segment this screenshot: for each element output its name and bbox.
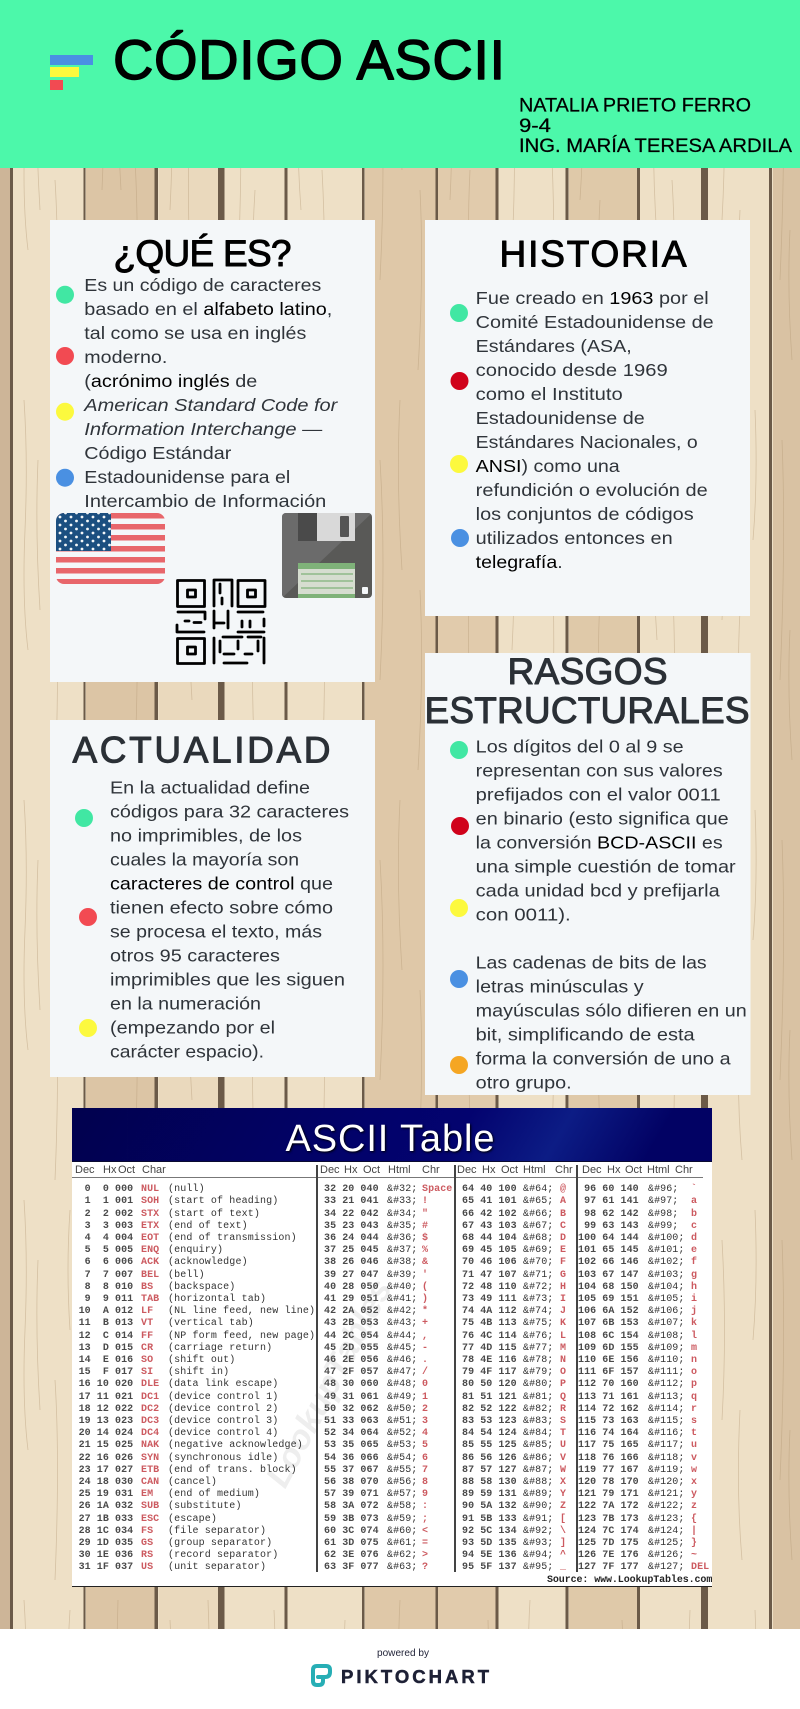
table column 1: NUL SOH STX ETX EOT ENQ ACK BEL BS TAB LF VT FF CR SO SI DLE DC1 DC2 DC3 DC4 NAK SYN ETB CAN EM SUB ESC FS GS RS US (141, 1184, 159, 1573)
author block: 9-4 (519, 116, 551, 137)
table column 3: &#64; &#65; &#66; &#67; &#68; &#69; &#70; &#71; &#72; &#73; &#74; &#75; &#76; &#77; &#78; &#79; &#80; &#81; &#82; &#83; &#84; &#85; &#86; &#87; &#88; &#89; &#90; &#91; &#92; &#93; &#94; &#95; (523, 1184, 553, 1573)
text block: rasgos: forma la conversión de uno a (476, 1048, 731, 1068)
text block: que es: American Standard Code for (83, 395, 339, 415)
column headers: Dec (457, 1164, 477, 1176)
source credit: Source: www.LookupTables.com (547, 1575, 712, 1586)
text block: historia: refundición o evolución de (476, 480, 708, 500)
text block: rasgos: letras minúsculas y (476, 976, 644, 996)
column headers: Char (142, 1164, 166, 1176)
panel: rasgos estructurales (424, 651, 750, 1095)
text block: rasgos: la conversión BCD-ASCII es (476, 832, 723, 852)
table column 4: ` a b c d e f g h i j k l m n o p q r s t u v w x y z { | } ~ DEL (691, 1184, 709, 1573)
panel: actualidad (50, 720, 375, 1077)
author block: ING. MARÍA TERESA ARDILA (519, 136, 792, 157)
bullets: rasgos (450, 741, 469, 1074)
heading: rasgos estructurales: RASGOS (508, 651, 668, 692)
text block: historia: utilizados entonces en (476, 528, 673, 548)
table banner: ASCII Table (286, 1118, 495, 1160)
text block: actualidad (110, 777, 349, 1061)
icon: floppy disk (282, 513, 372, 598)
text block: historia: Estándares (ASA, (476, 336, 632, 356)
text block: que es: Código Estándar (84, 443, 232, 463)
text block: rasgos: cada unidad bcd y prefijarla (476, 880, 720, 900)
text block: rasgos: otro grupo. (476, 1072, 572, 1092)
icon: qr code (177, 580, 265, 664)
table column 3: @ A B C D E F G H I J K L M N O P Q R S T U V W X Y Z [ \ ] ^ _ (560, 1184, 566, 1573)
table bottom rule (72, 1586, 712, 1587)
text block: historia: los conjuntos de códigos (476, 504, 694, 524)
text block: rasgos: Los dígitos del 0 al 9 se (476, 736, 684, 756)
text block: rasgos: una simple cuestión de tomar (476, 856, 736, 876)
text block: actualidad: tienen efecto sobre cómo (110, 897, 333, 917)
footer (0, 1629, 800, 1709)
column headers: Html (388, 1164, 411, 1176)
table column 2: &#32; &#33; &#34; &#35; &#36; &#37; &#38; &#39; &#40; &#41; &#42; &#43; &#44; &#45; &#46; &#47; &#48; &#49; &#50; &#51; &#52; &#53; &#54; &#55; &#56; &#57; &#58; &#59; &#60; &#61; &#62; &#63; (387, 1184, 417, 1573)
table column 2: Space ! " # $ % & ' ( ) * + , - . / 0 1 2 3 4 5 6 7 8 9 : ; < = > ? (422, 1184, 452, 1573)
table column 2 (324, 1184, 452, 1573)
table column 4 (578, 1184, 709, 1573)
column headers: Html (647, 1164, 670, 1176)
panel: que es (50, 220, 375, 682)
text block: rasgos: representan con sus valores (476, 760, 723, 780)
table column 3 (462, 1184, 566, 1573)
column headers: Chr (422, 1164, 440, 1176)
text block: historia: Fue creado en 1963 por el (476, 288, 709, 308)
text block: actualidad: otros 95 caracteres (110, 945, 280, 965)
table banner (72, 1108, 712, 1162)
text block: que es: (acrónimo inglés de (84, 371, 257, 391)
text block: actualidad: caracteres de control que (110, 873, 333, 893)
column headers: Oct (363, 1164, 380, 1176)
text block: que es: tal como se usa en inglés (84, 323, 306, 343)
table column 1: (null) (start of heading) (start of text) (end of text) (end of transmission) (enquiry) (acknowledge) (bell) (backspace) (horizontal tab) (NL line feed, new line) (vertical tab) (NP form feed, new page) (carriage return) (shift out) (shift in) (data link escape) (device control 1) (device control 2) (device control 3) (device control 4) (negative acknowledge) (synchronous idle) (end of trans. block) (cancel) (end of medium) (substitute) (escape) (file separator) (group separator) (record separator) (unit separator) (168, 1184, 315, 1573)
column headers: Hx (607, 1164, 620, 1176)
table column 1: 0 0 000 1 1 001 2 2 002 3 3 003 4 4 004 5 5 005 6 6 006 7 7 007 8 8 010 9 9 011 10 A 012 11 B 013 12 C 014 13 D 015 14 E 016 15 F 017 16 10 020 17 11 021 18 12 022 19 13 023 20 14 024 21 15 025 22 16 026 23 17 027 24 18 030 25 19 031 26 1A 032 27 1B 033 28 1C 034 29 1D 035 30 1E 036 31 1F 037 (79, 1184, 133, 1573)
text block: que es: Intercambio de Información (84, 491, 326, 511)
text block: actualidad: se procesa el texto, más (110, 921, 322, 941)
heading: rasgos estructurales: ESTRUCTURALES (424, 690, 750, 731)
icon: logo bars (50, 55, 93, 90)
bullets: actualidad (75, 809, 97, 1037)
ascii table image (72, 1108, 712, 1587)
header band (0, 0, 800, 168)
column headers: Dec (582, 1164, 602, 1176)
text block: actualidad: En la actualidad define (110, 777, 310, 797)
column headers: Html (523, 1164, 546, 1176)
column headers: Hx (103, 1164, 116, 1176)
bullets: historia (450, 304, 469, 547)
text block: rasgos: Las cadenas de bits de las (476, 952, 707, 972)
text block: actualidad: imprimibles que les siguen (110, 969, 345, 989)
column headers: Dec (320, 1164, 340, 1176)
piktochart wordmark: PIKTOCHART (341, 1666, 490, 1687)
text block: historia: Comité Estadounidense de (476, 312, 714, 332)
text block: rasgos: prefijados con el valor 0011 (476, 784, 721, 804)
table column 2: 32 20 040 33 21 041 34 22 042 35 23 043 36 24 044 37 25 045 38 26 046 39 27 047 40 28 050 41 29 051 42 2A 052 43 2B 053 44 2C 054 45 2D 055 46 2E 056 47 2F 057 48 30 060 49 31 061 50 32 062 51 33 063 52 34 064 53 35 065 54 36 066 55 37 067 56 38 070 57 39 071 58 3A 072 59 3B 073 60 3C 074 61 3D 075 62 3E 076 63 3F 077 (324, 1184, 379, 1573)
column headers: Chr (555, 1164, 573, 1176)
text block: historia: como el Instituto (476, 384, 623, 404)
text block: historia (476, 288, 714, 572)
table column 1 (79, 1184, 315, 1573)
text block: actualidad: carácter espacio). (110, 1041, 264, 1061)
column headers: Hx (344, 1164, 357, 1176)
table column 4: 96 60 140 97 61 141 98 62 142 99 63 143 100 64 144 101 65 145 102 66 146 103 67 147 104 68 150 105 69 151 106 6A 152 107 6B 153 108 6C 154 109 6D 155 110 6E 156 111 6F 157 112 70 160 113 71 161 114 72 162 115 73 163 116 74 164 117 75 165 118 76 166 119 77 167 120 78 170 121 79 171 122 7A 172 123 7B 173 124 7C 174 125 7D 175 126 7E 176 127 7F 177 (578, 1184, 639, 1573)
icon: piktochart logo (313, 1666, 330, 1685)
powered by label: powered by (377, 1647, 430, 1659)
text block: que es (83, 275, 339, 511)
column separators (316, 1165, 578, 1572)
text block: que es: Estadounidense para el (84, 467, 290, 487)
text block: rasgos: bit, simplificando de esta (476, 1024, 695, 1044)
author block: NATALIA PRIETO FERRO (519, 96, 751, 116)
icon: us flag (56, 513, 165, 584)
text block: actualidad: (empezando por el (110, 1017, 275, 1037)
author block (519, 96, 792, 157)
heading: actualidad: ACTUALIDAD (72, 730, 330, 771)
text block: rasgos (476, 736, 747, 1092)
heading: que es: ¿QUÉ ES? (114, 233, 292, 274)
text block: rasgos: con 0011). (476, 904, 571, 924)
column headers (72, 1164, 703, 1178)
text block: actualidad: en la numeración (110, 993, 261, 1013)
text block: historia: ANSI ) como una (476, 456, 620, 476)
heading: rasgos estructurales (424, 651, 750, 731)
panel: historia (425, 220, 750, 616)
column headers: Oct (625, 1164, 642, 1176)
text block: historia: telegrafía . (476, 552, 563, 572)
title: CÓDIGO ASCII (113, 28, 505, 91)
text block: historia: Estándares Nacionales, o (476, 432, 698, 452)
table column 4: &#96; &#97; &#98; &#99; &#100; &#101; &#102; &#103; &#104; &#105; &#106; &#107; &#108; &#109; &#110; &#111; &#112; &#113; &#114; &#115; &#116; &#117; &#118; &#119; &#120; &#121; &#122; &#123; &#124; &#125; &#126; &#127; (648, 1184, 684, 1573)
column headers: Dec (75, 1164, 95, 1176)
text block: rasgos: mayúsculas sólo difieren en un (476, 1000, 747, 1020)
column headers: Oct (501, 1164, 518, 1176)
text block: actualidad: no imprimibles, de los (110, 825, 302, 845)
text block: rasgos: en binario (esto significa que (476, 808, 729, 828)
heading: historia: HISTORIA (500, 234, 687, 275)
column headers: Oct (118, 1164, 135, 1176)
column headers: Chr (675, 1164, 693, 1176)
text block: historia: conocido desde 1969 (476, 360, 668, 380)
text block: que es: Information Interchange — (84, 419, 323, 439)
text block: actualidad: códigos para 32 caracteres (110, 801, 349, 821)
bullets: que es (56, 286, 74, 487)
text block: que es: Es un código de caracteres (84, 275, 321, 295)
text block: que es: basado en el alfabeto latino , (84, 299, 332, 319)
table column 3: 64 40 100 65 41 101 66 42 102 67 43 103 68 44 104 69 45 105 70 46 106 71 47 107 72 48 110 73 49 111 74 4A 112 75 4B 113 76 4C 114 77 4D 115 78 4E 116 79 4F 117 80 50 120 81 51 121 82 52 122 83 53 123 84 54 124 85 55 125 86 56 126 87 57 127 88 58 130 89 59 131 90 5A 132 91 5B 133 92 5C 134 93 5D 135 94 5E 136 95 5F 137 (462, 1184, 517, 1573)
watermark: LookupTables (259, 1273, 400, 1493)
column headers: Hx (482, 1164, 495, 1176)
text block: historia: Estadounidense de (476, 408, 645, 428)
text block: que es: moderno. (84, 347, 167, 367)
text block: actualidad: cuales la mayoría son (110, 849, 299, 869)
